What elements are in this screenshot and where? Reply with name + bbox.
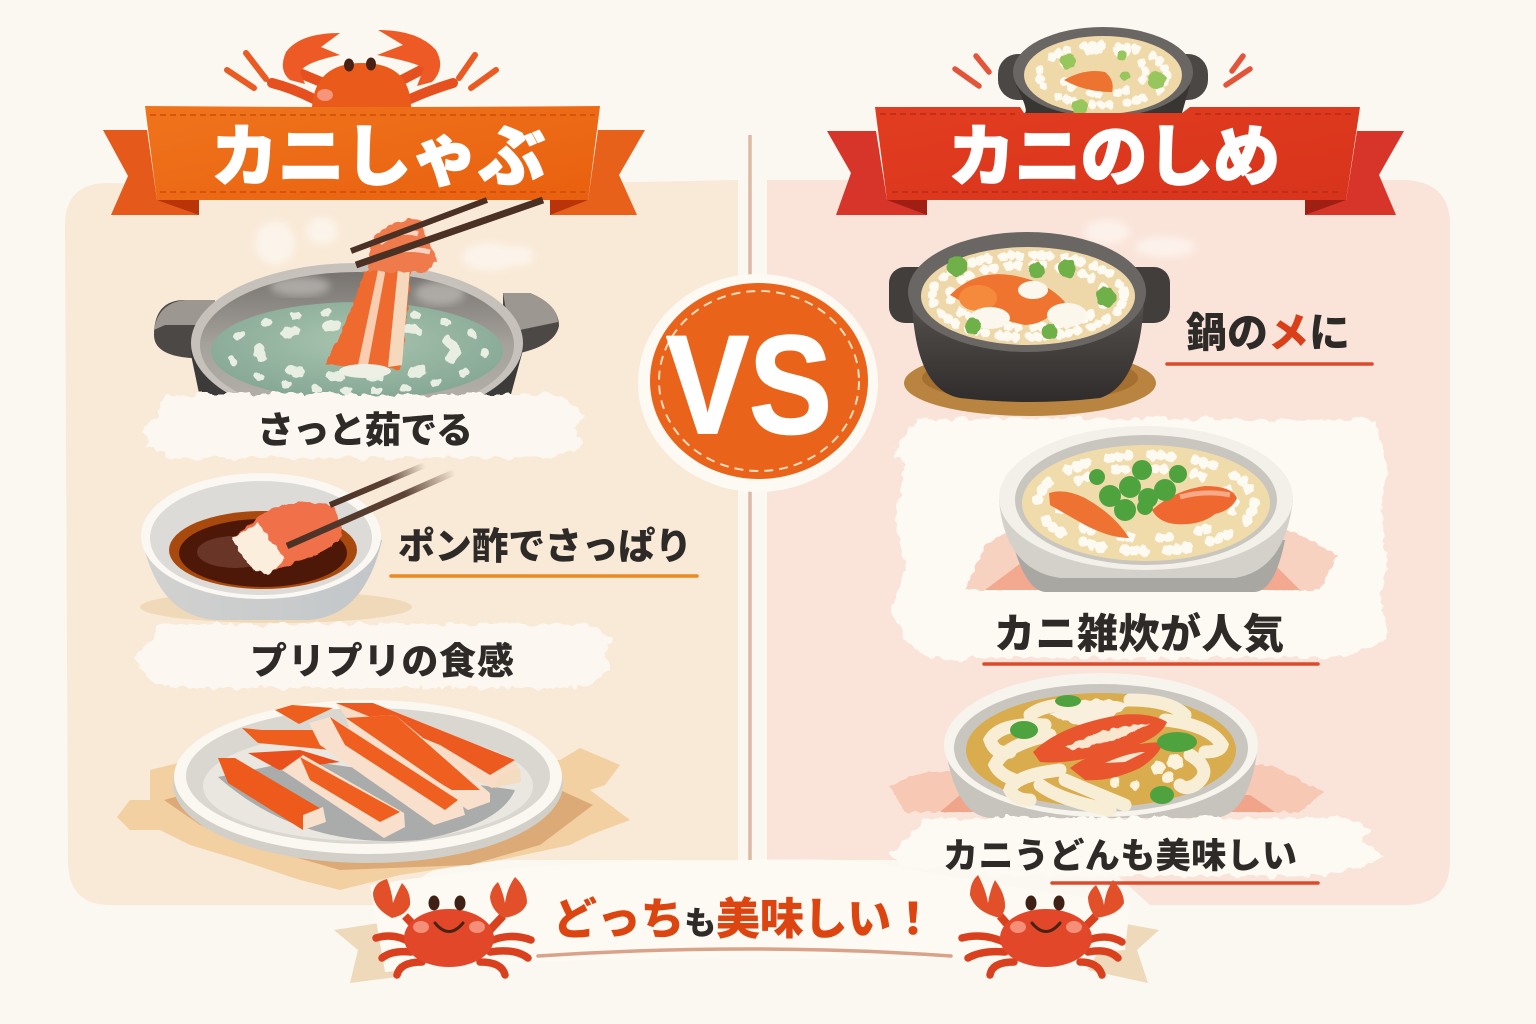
illustration: crab meat on chopsticks [325, 200, 543, 378]
label strip: satto yuderu [142, 394, 585, 458]
vs badge [638, 274, 878, 492]
illustration: crab udon bowl [944, 673, 1258, 818]
panel: left background [65, 180, 738, 905]
plate shadow [117, 748, 630, 890]
text: both delicious: どっちも美味しい！ [553, 895, 935, 944]
label strip: udon: カニうどんも美味しい [943, 837, 1297, 876]
center divider [748, 135, 752, 865]
icon: top rice pot [998, 27, 1208, 117]
illustration: stone pot on trivet [889, 232, 1170, 416]
label strip: puripuri [135, 624, 612, 688]
steam clouds right [1085, 220, 1195, 257]
heading: kani shabu: カニしゃぶ [211, 120, 545, 195]
crab leg middle [248, 715, 490, 825]
panel: right background [767, 180, 1450, 905]
illustration: ponzu bowl [140, 465, 455, 623]
icon: bottom left crab [373, 877, 531, 975]
label strip: puripuri: プリプリの食感 [250, 641, 514, 682]
bottom banner [334, 859, 1159, 983]
steam clouds left [255, 217, 534, 271]
illustration: crab zosui bowl [999, 426, 1293, 592]
illustration: shabu pot [154, 263, 559, 423]
text: kani zosui: カニ雑炊が人気 [994, 611, 1284, 657]
sparks beside rice pot [955, 56, 1250, 86]
icon: bottom right crab [962, 875, 1124, 975]
text: nabe no shime: 鍋のメに [1186, 310, 1350, 356]
heading: kani no shime: カニのしめ [948, 120, 1280, 195]
left ribbon banner [103, 106, 645, 215]
right ribbon banner [827, 107, 1404, 215]
icon: top crab [227, 30, 496, 107]
label strip: zosui card [892, 418, 1388, 664]
bowl shadow [965, 530, 1338, 590]
label strip: udon [890, 818, 1385, 876]
crab leg front [218, 755, 405, 838]
vs badge: VS [666, 306, 832, 463]
text: ponzu: ポン酢でさっぱり [398, 526, 692, 567]
crab leg back [242, 703, 521, 788]
udon shadow [889, 765, 1324, 812]
label strip: satto yuderu: さっと茹でる [257, 410, 473, 451]
illustration: plate of crab legs [173, 700, 563, 863]
